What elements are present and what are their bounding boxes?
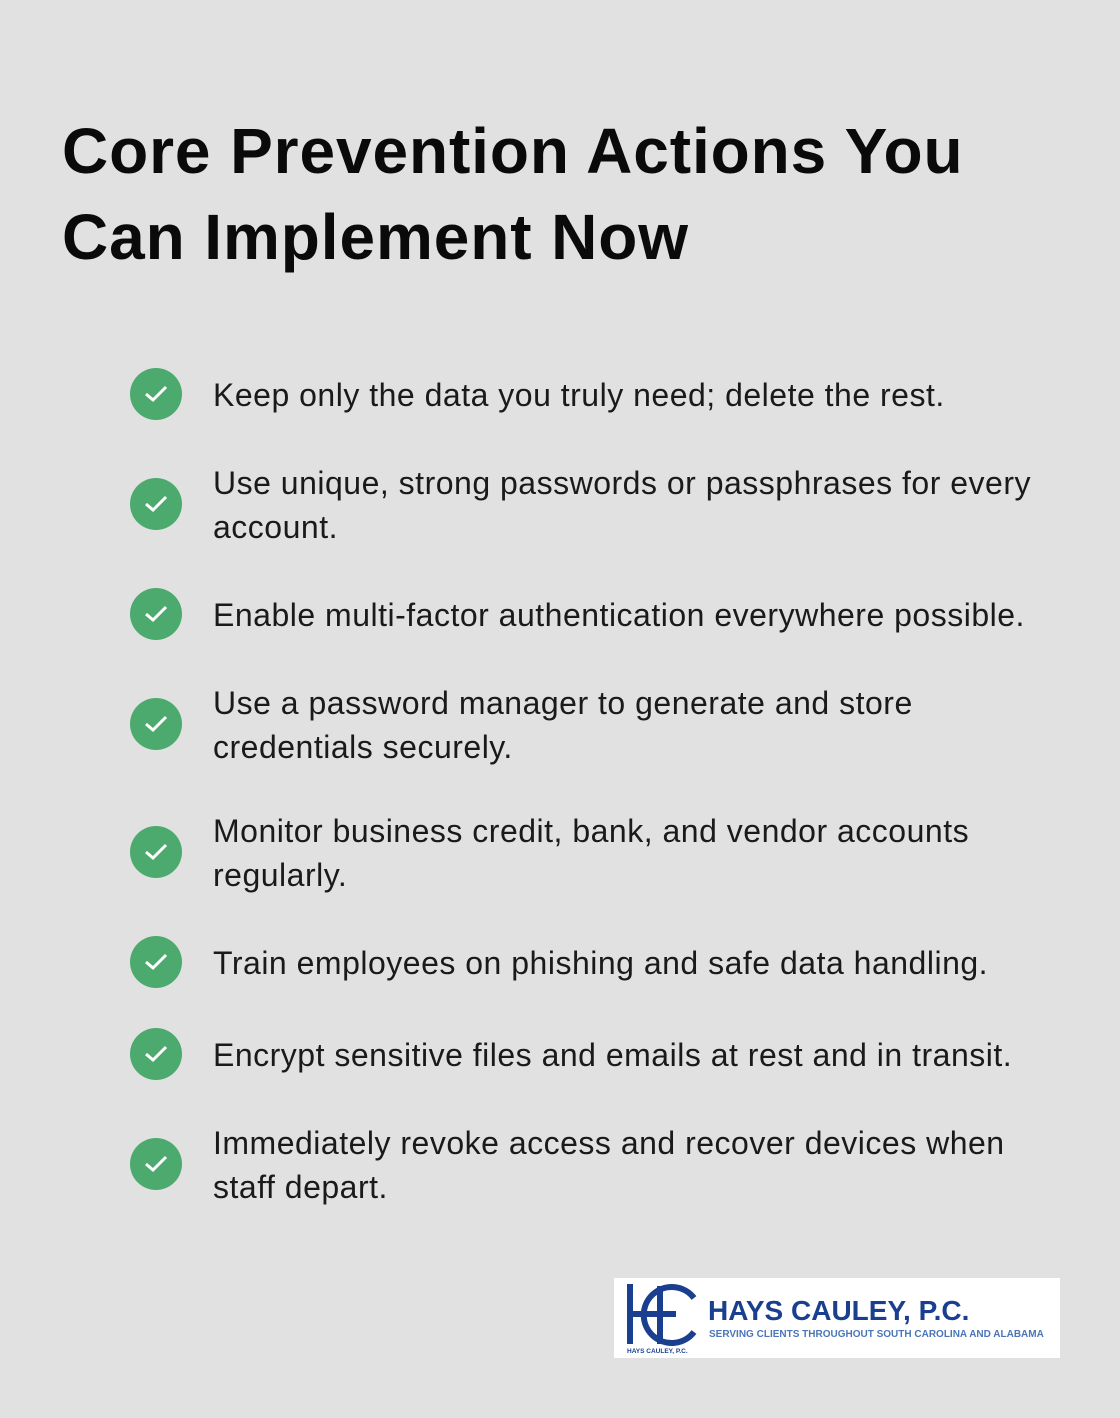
item 3: Enable multi-factor authentication everywhere possible. xyxy=(213,597,1025,633)
item 5 xyxy=(130,813,969,893)
title xyxy=(62,115,964,273)
logo: SERVING CLIENTS THROUGHOUT SOUTH CAROLINA AND ALABAMA xyxy=(709,1329,1044,1340)
item 8: Immediately revoke access and recover devices when xyxy=(213,1125,1005,1161)
item 7: Encrypt sensitive files and emails at rest and in transit. xyxy=(213,1037,1012,1073)
item 4: Use a password manager to generate and store xyxy=(213,685,913,721)
item 1: Keep only the data you truly need; delete the rest. xyxy=(213,377,945,413)
item 2: Use unique, strong passwords or passphrases for every xyxy=(213,465,1031,501)
item 8: staff depart. xyxy=(213,1169,388,1205)
item 4: credentials securely. xyxy=(213,729,513,765)
item 6: Train employees on phishing and safe data handling. xyxy=(213,945,988,981)
item 6 xyxy=(130,936,988,988)
logo text: HAYS CAULEY, P.C. xyxy=(708,1295,969,1326)
title: Core Prevention Actions You xyxy=(62,115,964,187)
title: Can Implement Now xyxy=(62,201,689,273)
logo: HAYS CAULEY, P.C. xyxy=(627,1348,688,1355)
item 2: account. xyxy=(213,509,338,545)
item 4 xyxy=(130,685,913,765)
item 1 xyxy=(130,368,945,420)
icon: HC monogram xyxy=(627,1284,696,1346)
item 5: Monitor business credit, bank, and vendor accounts xyxy=(213,813,969,849)
item 3 xyxy=(130,588,1025,640)
item 8 xyxy=(130,1125,1005,1205)
item 2 xyxy=(130,465,1031,545)
item 5: regularly. xyxy=(213,857,347,893)
item 7 xyxy=(130,1028,1012,1080)
logo xyxy=(614,1278,1060,1358)
